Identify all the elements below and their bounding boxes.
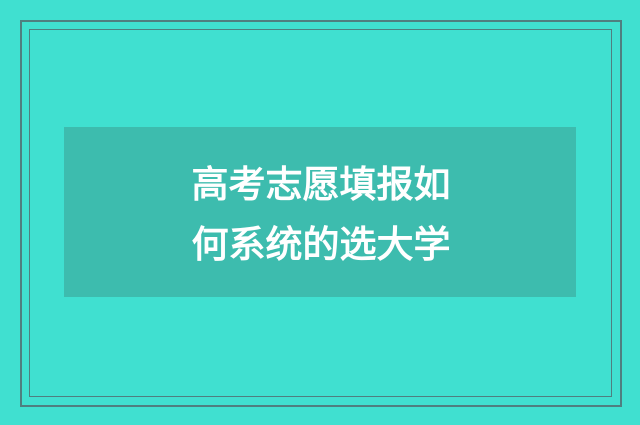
title band <box>64 127 576 297</box>
title line 2: 何系统的选大学 <box>192 224 450 265</box>
inner frame <box>29 29 612 397</box>
title line 1: 高考志愿填报如 <box>192 164 450 205</box>
